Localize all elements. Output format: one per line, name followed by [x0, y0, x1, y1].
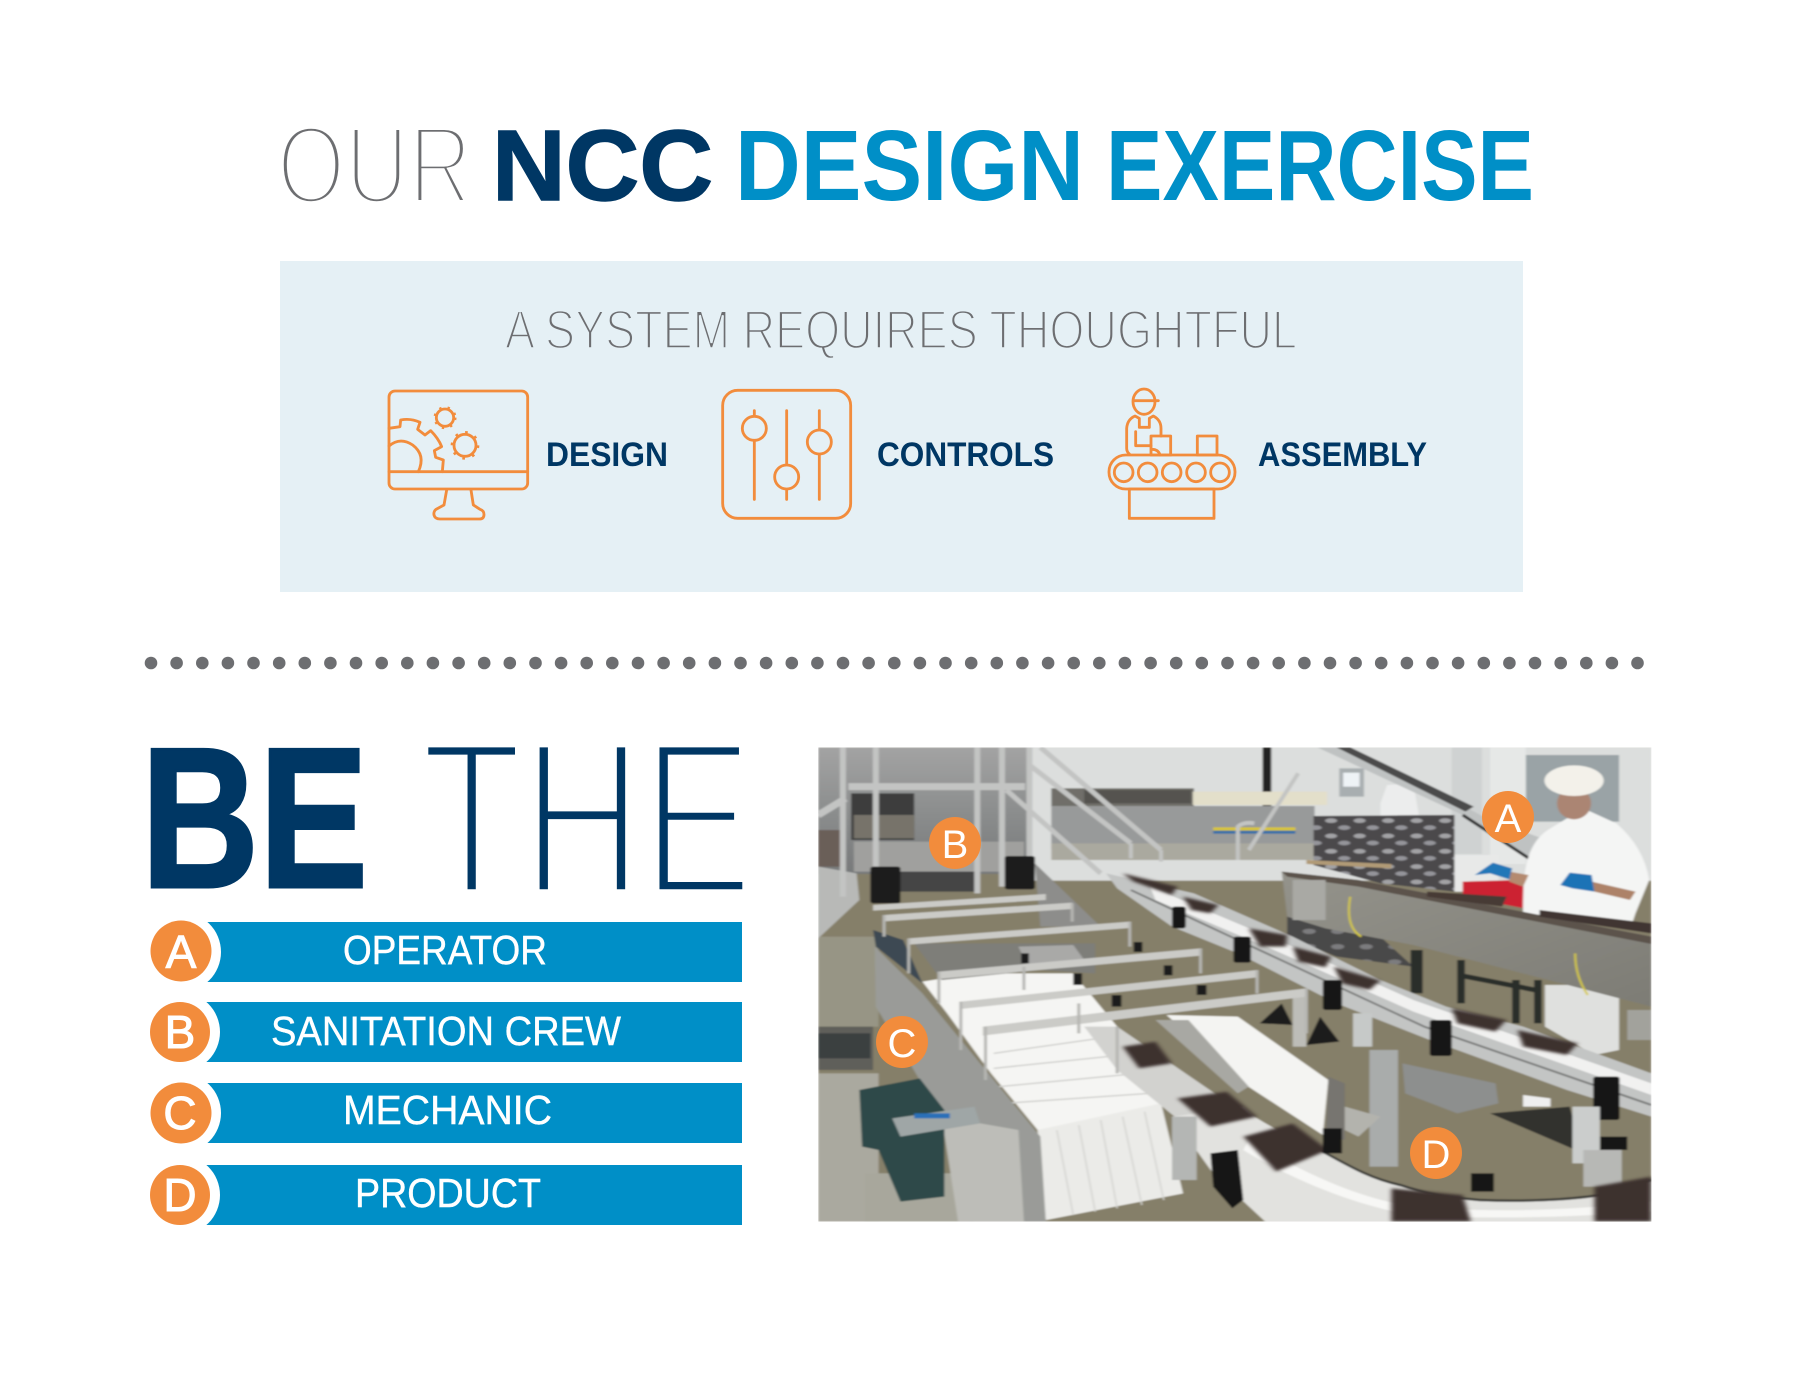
left frame and motor [875, 947, 1046, 1222]
cross bars [873, 894, 1306, 1036]
photo marker A: A [1495, 797, 1522, 841]
red crate [1461, 879, 1524, 908]
photo marker C: C [888, 1022, 916, 1066]
role row: C mechanic [130, 1073, 742, 1153]
role row: A operator [130, 912, 742, 992]
role row: A operator: A [166, 926, 197, 978]
heading word: THE: THE [421, 695, 753, 941]
label: ASSEMBLY: ASSEMBLY [1258, 436, 1427, 474]
role list [130, 912, 742, 1235]
panel: system requires [280, 261, 1523, 592]
role row: D product: D [163, 1169, 197, 1221]
label: CONTROLS: CONTROLS [877, 436, 1054, 474]
front curved conveyor [1172, 1107, 1651, 1222]
photo marker B: B [942, 823, 968, 867]
icon: monitor with gears [389, 391, 528, 519]
floor and walls [818, 747, 1651, 1222]
title word: NCC: NCC [492, 110, 713, 222]
dotted divider [145, 657, 1644, 669]
title word: EXERCISE: EXERCISE [1106, 110, 1534, 222]
incline conveyor [1317, 747, 1542, 862]
icon: sliders [723, 390, 851, 518]
back worker [1380, 783, 1419, 817]
operator [1523, 808, 1649, 922]
photo: conveyor line with operator [818, 747, 1651, 1222]
photo marker A [1482, 791, 1534, 843]
role row: C mechanic: MECHANIC [343, 1087, 552, 1133]
panel heading: A SYSTEM REQUIRES THOUGHTFUL [505, 298, 1297, 360]
background machinery [1051, 788, 1194, 807]
photo marker D [1410, 1127, 1462, 1179]
floor feet and tub [1260, 1003, 1293, 1025]
role row: D product [130, 1155, 742, 1235]
title word: DESIGN: DESIGN [735, 110, 1084, 222]
photo marker B [929, 817, 981, 869]
heading word: BE: BE [141, 707, 368, 930]
role row: B sanitation crew: B [165, 1006, 195, 1058]
icon: assembly worker at conveyor [1109, 389, 1235, 518]
title word: OUR: OUR [277, 104, 472, 228]
photo marker D: D [1422, 1133, 1450, 1177]
mid conveyor [1106, 873, 1651, 1117]
role row: C mechanic: C [163, 1087, 197, 1139]
role row: B sanitation crew [130, 992, 742, 1072]
title [277, 104, 1534, 228]
shrink-wrapped pallet [1314, 815, 1454, 892]
right conveyor [1282, 872, 1651, 1007]
photo marker C [876, 1016, 928, 1068]
white belts [1167, 1015, 1328, 1135]
role row: D product: PRODUCT [355, 1170, 541, 1216]
role row: B sanitation crew: SANITATION CREW [271, 1008, 622, 1054]
heading: BE THE [141, 695, 753, 941]
label: DESIGN: DESIGN [546, 436, 668, 474]
posts and stair rails [818, 747, 1298, 897]
role row: A operator: OPERATOR [343, 927, 547, 973]
